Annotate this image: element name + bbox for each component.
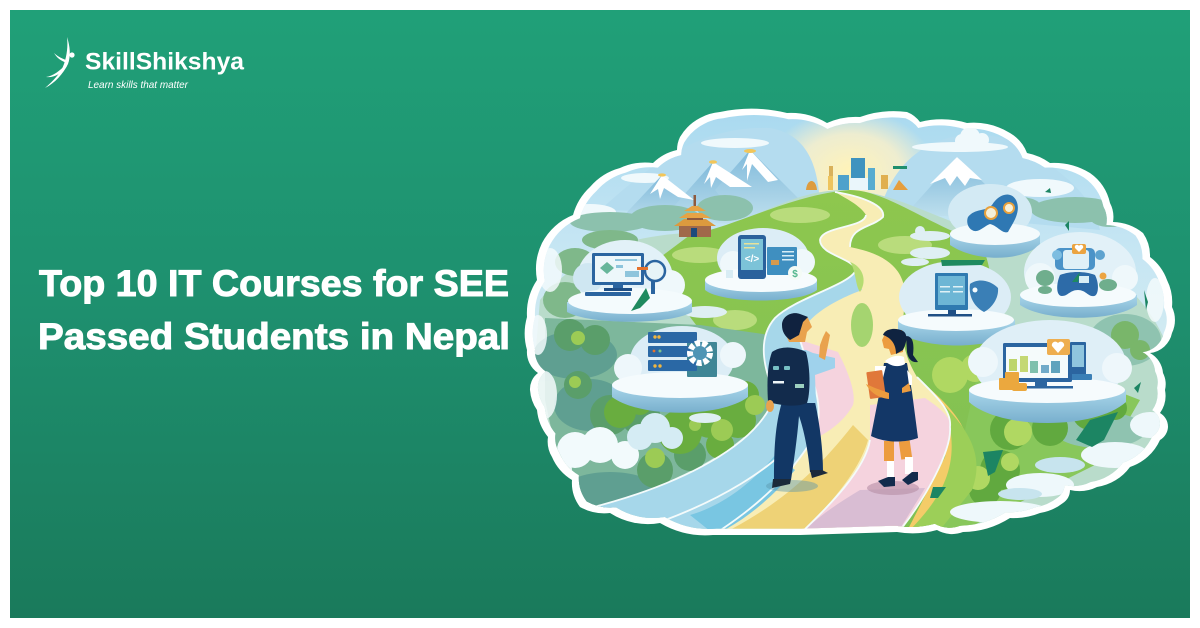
- logo wordmark: SkillShikshya: [85, 48, 245, 76]
- icon: side panel: [1070, 342, 1086, 377]
- boy shadow: [766, 480, 818, 492]
- foliage lower-left: [533, 318, 778, 508]
- icon: shield: [970, 281, 998, 312]
- girl book: [866, 370, 886, 399]
- temple: [674, 195, 716, 237]
- green hills: [650, 190, 1005, 535]
- road: lane lines: [590, 192, 950, 535]
- soft clouds on hills: [683, 226, 950, 423]
- bottom mist clouds: [529, 248, 1170, 523]
- boy lower hand: [766, 400, 774, 412]
- icon: magnifying glass: [645, 261, 665, 281]
- icon: server rack: [648, 332, 697, 371]
- girl face: [882, 330, 903, 355]
- icon: tablet with code symbol: [738, 235, 766, 279]
- platform: code and tablet course: [705, 228, 817, 300]
- icon: stacked coins: [999, 372, 1027, 391]
- girl arms: [866, 383, 911, 399]
- clipped scene: [520, 105, 1180, 545]
- mid ground meadow: [520, 190, 1180, 540]
- girl shoes: [878, 472, 918, 487]
- road: saturated blue shadow lane: [690, 455, 795, 535]
- boy hair: [782, 313, 808, 340]
- boy raised hand: [819, 331, 830, 360]
- logo: SkillShikshya: [45, 37, 245, 91]
- grass strip beside the road: [913, 405, 976, 527]
- far tree line: [570, 195, 1130, 232]
- winding road: [590, 192, 950, 536]
- platform: analytics dashboard course: [968, 320, 1132, 423]
- icon: small trophy: [726, 270, 733, 278]
- title: Top 10 IT Courses for SEE: [39, 263, 509, 304]
- white cloud outline: [525, 109, 1175, 535]
- icon: gamepad: [1057, 272, 1098, 296]
- green shard: [941, 260, 985, 266]
- road: green island: [851, 303, 873, 347]
- platform: robot and gamepad course: [1020, 232, 1138, 318]
- platform: code and tablet course: $: [792, 269, 798, 280]
- boy shirt and arm: [778, 350, 835, 403]
- road: lilac bottom lane: [807, 488, 925, 528]
- girl shadow: [867, 481, 919, 495]
- icon: robot head: [1055, 248, 1095, 270]
- sky: [520, 105, 1180, 545]
- girl dress: [871, 363, 918, 442]
- road: pink inner lane: [800, 340, 854, 440]
- boy student: [766, 313, 835, 492]
- icon: heart speech bubble: [1072, 244, 1086, 254]
- icon: desktop monitor: [935, 273, 968, 310]
- platform: monitor and magnifier course: [567, 240, 692, 322]
- road: blue lane: [590, 270, 862, 536]
- icon: server panel: [687, 342, 717, 377]
- icon: document panel: [767, 247, 797, 275]
- background clouds: [581, 128, 1074, 215]
- girl legs: [884, 440, 912, 461]
- foliage lower-right: [930, 314, 1161, 532]
- mountains: [626, 149, 985, 216]
- logo tagline: Learn skills that matter: [88, 79, 188, 91]
- green background shards showing through the scene: [930, 188, 1148, 498]
- icon: game controller: [967, 195, 1018, 232]
- foliage upper-left: [543, 230, 638, 318]
- boy legs: [774, 402, 823, 480]
- icon: green leaf shard: [631, 288, 650, 311]
- backpack: [767, 347, 810, 406]
- girl hair and ponytail: [883, 329, 918, 362]
- road: golden dotted patch: [732, 425, 868, 529]
- illustration: career path landscape inside a cloud: [520, 105, 1180, 545]
- platform: monitor and shield course: [898, 260, 1015, 346]
- sun glow behind city: [788, 118, 921, 196]
- right-side orange grass strip: [909, 388, 964, 527]
- icon: dashboard monitor with bars: [1003, 343, 1072, 382]
- icon: heart bubble: [1047, 339, 1070, 355]
- distant blue ranges: [600, 128, 1100, 230]
- girl student: [866, 329, 919, 495]
- boy shoes: [772, 470, 828, 488]
- title: Passed Students in Nepal: [38, 316, 510, 357]
- boy head: [783, 314, 812, 342]
- platform: server course: [612, 326, 748, 413]
- logo icon: leaping figure: [45, 37, 75, 88]
- icon: dollar badge: [788, 266, 797, 275]
- platform: code and tablet course: </>: [745, 254, 759, 265]
- road: pink outer lane: [813, 398, 950, 526]
- girl collar and sleeve: [875, 356, 912, 385]
- icon: leaves: [1036, 270, 1117, 294]
- mountain snow caps: [650, 150, 982, 200]
- road: green curve island: [850, 262, 864, 292]
- title: [38, 263, 510, 357]
- platform: game controller course: [948, 184, 1040, 258]
- icon: desktop monitor: [592, 253, 644, 285]
- icon: gear: [690, 343, 710, 363]
- road base: yellow lane: [713, 192, 950, 536]
- distant city on the hill: [806, 158, 908, 190]
- girl socks: [887, 457, 913, 478]
